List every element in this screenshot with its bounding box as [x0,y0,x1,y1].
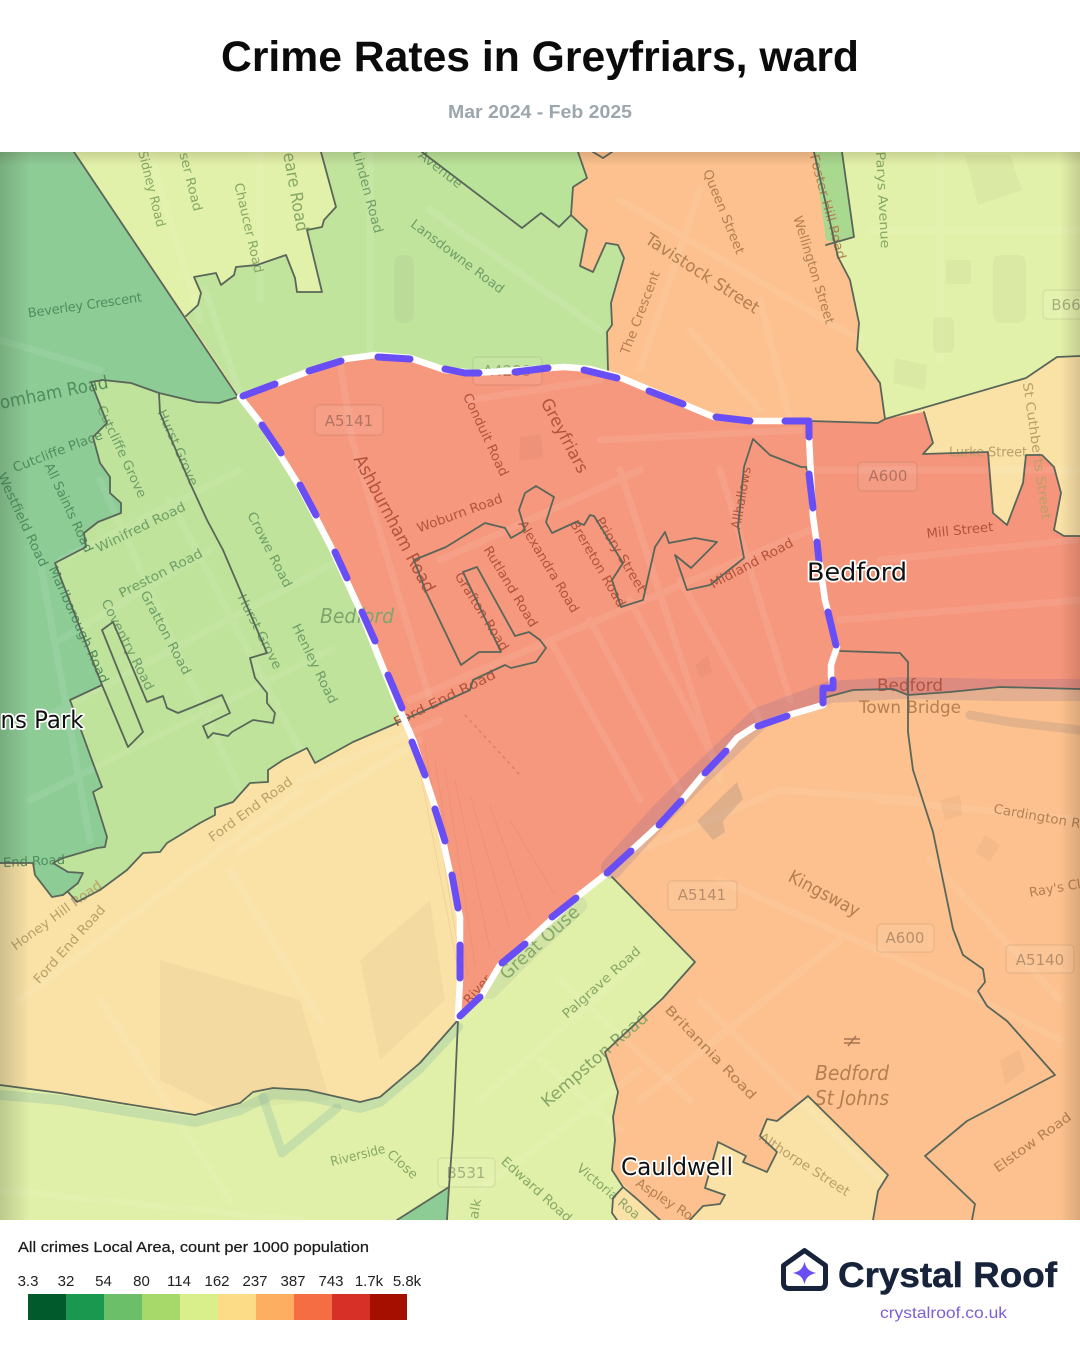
road labels: dark green areas: End Road [3,853,65,871]
legend values: 114 [167,1273,191,1290]
legend values: 237 [242,1273,268,1290]
road labels: ward and east red areas: Bedford [877,676,943,696]
website url: crystalroof.co.uk [880,1305,1008,1322]
road labels: yellow areas: Althorpe Street [756,1130,852,1200]
legend [18,1239,422,1320]
road labels: dark green areas: Cutcliffe Place [11,428,105,476]
road labels: pale green areas: Riverside [329,1142,387,1170]
title: Crime Rates in Greyfriars, ward [221,33,859,81]
choropleth map [0,148,1080,1226]
road labels: mid green areas: Preston Road [117,546,205,602]
road labels: orange areas: Foster Hill Road [806,153,848,261]
road labels: ward and east red areas: Grafton Road [451,570,511,654]
road number signs: A5141 [678,886,726,904]
road labels: ward and east red areas: Ashburnham Road [349,452,439,596]
road labels: orange areas: Ray's Cl [1028,877,1080,901]
map vignette [0,152,1080,1220]
road labels: dark green areas: Marlborough Road [45,564,111,686]
legend values [18,1273,422,1290]
legend values: 54 [95,1273,112,1290]
road number signs [315,290,1080,1187]
road labels: mid green areas: Hurst Grove [234,592,284,672]
road number signs: A600 [869,467,907,485]
legend values: 162 [204,1273,230,1290]
road labels: mid green areas: Henley Road [288,622,340,706]
road labels: orange areas [618,153,1080,1224]
road labels: pale green areas: Chaucer Road [230,181,266,275]
road labels: ward and east red areas: Ford End Road [391,668,499,730]
road labels: orange areas: Town Bridge [858,698,961,718]
roads underlay [338,364,1080,1083]
place names: ns Park [0,706,84,734]
road labels: mid green areas [93,148,507,706]
road labels: pale green areas: Edward Road [498,1154,574,1226]
railway station icon [844,1036,860,1046]
legend values: 80 [133,1273,150,1290]
road labels: orange areas: Elstow Road [991,1110,1075,1176]
road labels: mid green areas: Hurst Grove [153,407,201,489]
road labels: pale green areas: Palgrave Road [560,944,644,1022]
road labels: pale green areas: Great Ouse [496,902,584,984]
road labels: orange areas: Tavistock Street [640,229,763,319]
logo wordmark: Crystal Roof [838,1256,1057,1295]
subtitle: date range: Mar 2024 - Feb 2025 [448,102,632,122]
road labels: mid green areas: Avenue [415,148,465,192]
road labels: yellow areas: St Cuthberts Street [1019,382,1053,520]
road labels: dark green areas [0,291,143,871]
road labels: pale green areas: ser Road [175,151,205,213]
area boundary lines [0,152,1080,1220]
road labels: orange areas: Bedford [815,1061,889,1085]
road labels: yellow areas: Lurke Street [949,446,1027,460]
road labels: dark green areas: Beverley Crescent [27,291,143,321]
zone: Greyfriars ward [240,357,837,1018]
zones: crime rate areas [0,152,1080,1220]
road labels: dark green areas: All Saints Road [41,461,95,555]
icon: house with star [784,1250,826,1288]
legend title: All crimes Local Area, count per 1000 population [18,1239,369,1256]
buildings and parkland [160,155,1026,1110]
road labels: orange areas: Aspley Ro [633,1176,695,1224]
logo: Crystal Roof [784,1250,1057,1322]
road labels: ward and east red areas: Brereton Road [566,518,628,610]
place names [0,558,907,1181]
road labels: orange areas: The Crescent [618,269,664,358]
road labels: ward and east red areas [349,391,994,1008]
road labels: mid green areas: Winifred Road [94,500,188,556]
road labels: mid green areas: Lansdowne Road [407,217,507,297]
road number signs: B66 [1051,296,1080,314]
legend colour scale [28,1294,407,1320]
road labels: mid green areas: Coventry Road [98,597,156,693]
road labels: ward and east red areas: Rutland Road [480,544,540,630]
road number signs: A5140 [1016,951,1064,969]
road labels: pale green areas: Kempston Road [537,1008,653,1112]
road labels: ward and east red areas: Conduit Road [459,391,511,479]
ward outline: Greyfriars dashed boundary [240,355,837,1018]
road labels: mid green areas: Gratton Road [137,588,193,678]
road labels: orange areas: Wellington Street [789,214,837,326]
road labels: ward and east red areas: Priory Street [592,515,648,595]
road labels: pale green areas: alk [467,1197,485,1220]
road number signs: A600 [886,929,924,947]
road labels: pale green areas: Victoria Roa [573,1161,643,1223]
road labels: ward and east red areas: River [461,972,495,1008]
road labels: pale green areas [134,149,892,1226]
road number signs: A4280 [483,362,531,380]
road labels: ward and east red areas: Woburn Road [415,492,505,536]
road labels: mid green areas: Linden Road [349,149,385,235]
road number signs: B531 [447,1164,485,1182]
road labels: yellow areas: Ford End Road [206,775,296,845]
legend values: 3.3 [18,1273,38,1290]
road labels: pale green areas: Parys Avenue [872,151,892,249]
legend values: 5.8k [393,1273,422,1290]
road number signs: A5141 [325,412,373,430]
road labels: orange areas: Britannia Road [661,1003,759,1103]
legend values: 743 [318,1273,344,1290]
road labels: orange areas: Cardington R [992,802,1080,832]
road labels: mid green areas: Crowe Road [243,510,295,590]
road labels: dark green areas: omham Road [0,372,110,414]
road labels: yellow areas [9,382,1053,1200]
road labels: ward and east red areas: Greyfriars [536,395,592,477]
road labels: ward and east red areas: Mill Street [926,520,994,542]
road labels: mid green areas: Cutcliffe Grove [93,404,149,500]
place names: Cauldwell [621,1153,733,1181]
road labels: pale green areas: eare Road [278,151,312,233]
road labels: yellow areas: Honey Hill Road [9,878,105,954]
railway tracks [415,715,555,990]
road labels: ward and east red areas: Alexandra Road [515,518,581,616]
road labels: orange areas: Queen Street [699,167,747,257]
road labels: orange areas: Kingsway [785,866,864,922]
road labels: pale green areas: Close [384,1147,420,1183]
road labels: yellow areas: Ford End Road [31,903,109,987]
river Great Ouse [0,688,1080,1153]
legend values: 387 [280,1273,306,1290]
road labels: ward and east red areas: Allhallows [729,465,755,530]
legend values: 32 [58,1273,74,1290]
legend values: 1.7k [355,1273,384,1290]
italic ward label: Bedford: Bedford [320,604,394,628]
place names: Bedford [807,558,907,586]
road labels: orange areas: St Johns [815,1086,889,1110]
road labels: pale green areas: Sidney Road [134,149,168,229]
road labels: ward and east red areas: Midland Road [708,536,796,592]
